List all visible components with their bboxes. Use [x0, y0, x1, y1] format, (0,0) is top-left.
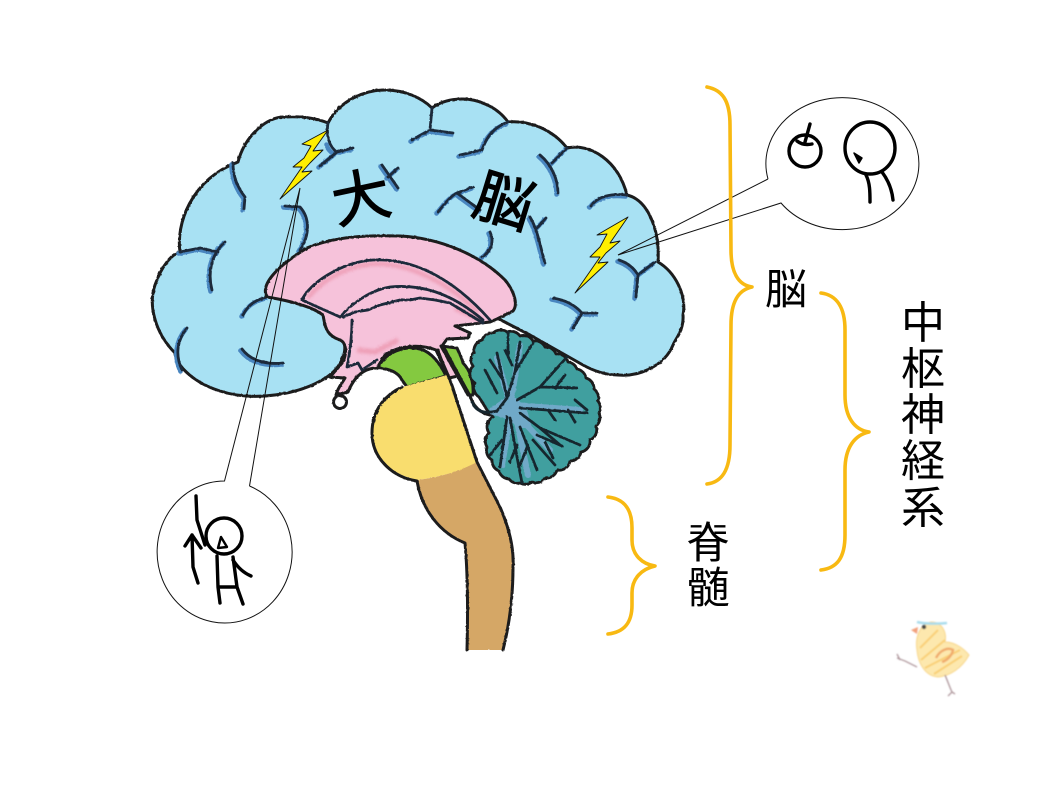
bracket: brain — [707, 87, 752, 484]
brainstem: pons yellow — [372, 375, 477, 480]
label: central nervous system: 系 — [901, 484, 945, 533]
brainstem: tectum green — [441, 346, 473, 395]
label: spinal cord: 髄 — [686, 565, 730, 613]
label: central nervous system: 中 — [901, 299, 945, 348]
icon: apple — [789, 124, 821, 167]
label: central nervous system: 経 — [901, 437, 945, 486]
cerebellum — [470, 330, 600, 484]
bracket: spinal cord — [608, 497, 655, 634]
label: central nervous system: 神 — [901, 391, 945, 440]
left-side lightning bolt — [280, 130, 328, 199]
pituitary bulb — [334, 396, 346, 408]
label: cerebrum 大: 大 — [326, 161, 396, 236]
cerebrum — [152, 90, 684, 396]
label: spinal cord: 脊 — [686, 520, 730, 568]
diencephalon and corpus callosum — [265, 236, 515, 395]
callout: seeing an apple — [618, 98, 919, 255]
label: brain: 脳 — [765, 266, 807, 313]
arbor vitae veins — [472, 332, 587, 483]
icon: stick figure looking — [845, 122, 895, 202]
sulci folds — [176, 108, 655, 372]
callout: moving the arm — [157, 188, 300, 623]
icon: chick mascot — [897, 622, 969, 696]
brainstem: midbrain green — [378, 348, 446, 387]
icon: stick figure raising arm — [185, 496, 251, 604]
right-side lightning bolt — [575, 217, 628, 293]
brainstem outlines — [372, 346, 513, 650]
panel: brain diagram — [152, 90, 684, 650]
label: cerebrum 脳: 脳 — [466, 163, 541, 242]
label: central nervous system: 枢 — [901, 345, 945, 394]
bracket: central nervous system — [821, 293, 869, 570]
spinal cord tan — [418, 462, 513, 650]
pink shading — [308, 264, 482, 352]
